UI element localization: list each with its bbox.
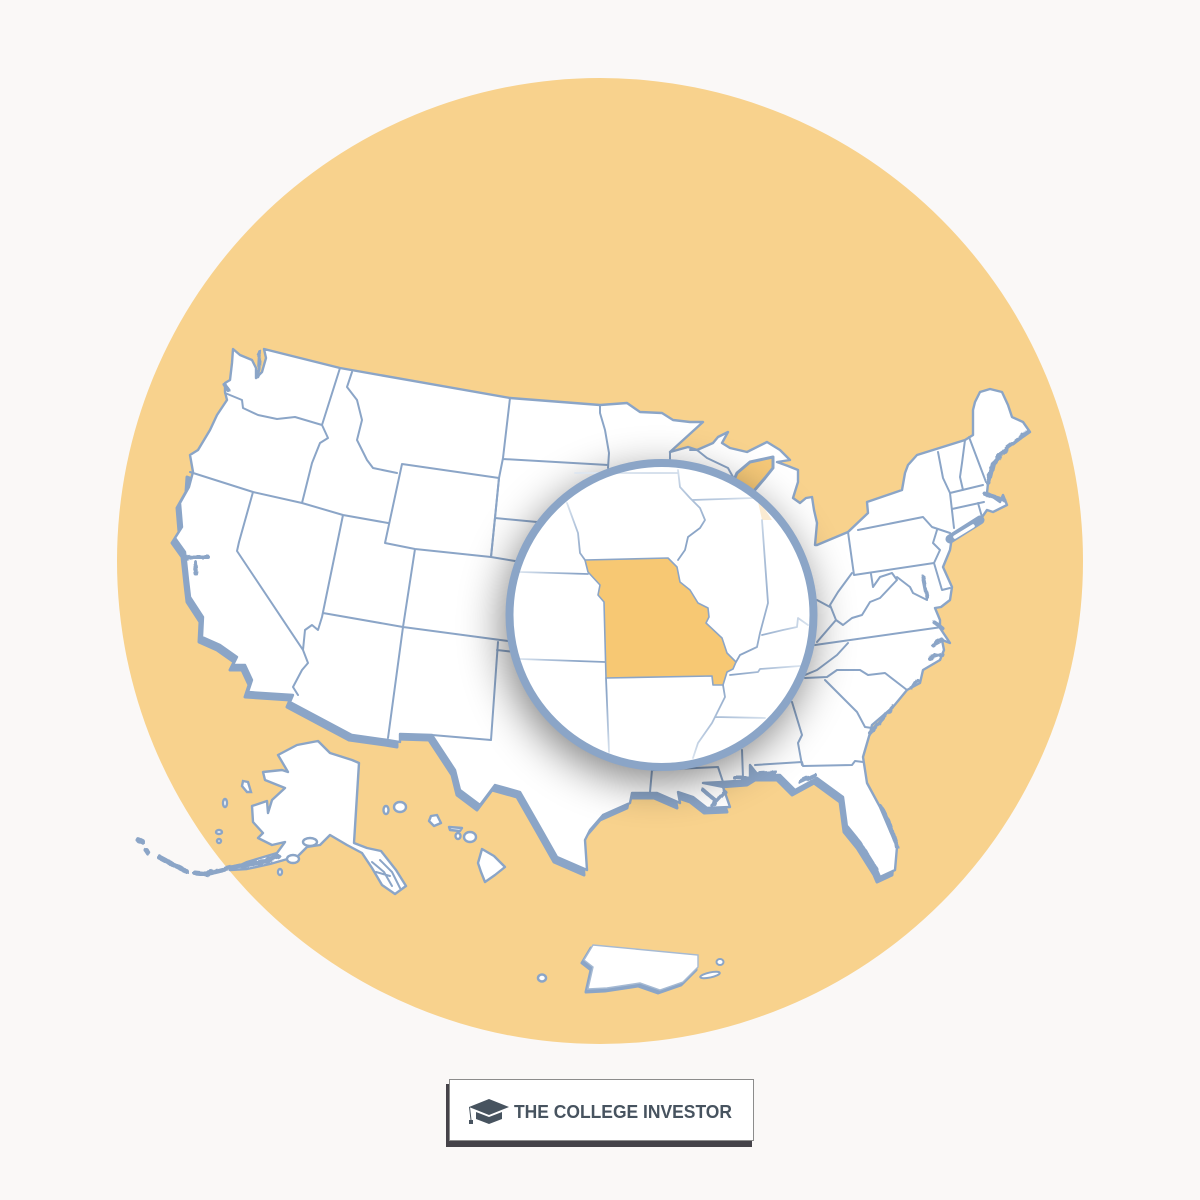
coastline extrusion: [172, 477, 894, 882]
Missouri highlighted: [585, 558, 736, 685]
long island: [950, 520, 980, 539]
thick coastal details: [183, 352, 1028, 870]
magnifier shadow: [503, 473, 811, 781]
lake michigan: [733, 457, 773, 492]
island: Mona: [538, 974, 546, 982]
state borders southeast: [650, 643, 907, 792]
state borders northeast: [848, 437, 986, 575]
state borders mid atlantic: [815, 563, 950, 645]
state borders plains: [491, 398, 609, 557]
map: Puerto Rico: [538, 945, 724, 993]
state borders upper midwest: [670, 450, 733, 477]
map: contiguous United States: [172, 349, 1030, 882]
alaskan islands: [216, 781, 317, 875]
island: Vieques: [700, 970, 720, 980]
lake ghost: [757, 497, 772, 520]
icon: graduation cap: [469, 1099, 509, 1124]
island: Culebra: [716, 959, 724, 965]
logo badge: [446, 1080, 754, 1147]
map: Hawaii: [384, 802, 505, 882]
orange circle backdrop: [117, 78, 1083, 1044]
magnifier lens: [510, 463, 814, 767]
southeast archipelago channels: [372, 860, 400, 888]
lens state borders: [520, 470, 808, 758]
badge panel: [450, 1080, 754, 1140]
lens ring: [510, 463, 814, 767]
map: Alaska: [138, 741, 406, 894]
state borders west: [190, 368, 515, 740]
aleutian islands: [138, 840, 278, 874]
wordmark: THE COLLEGE INVESTOR: [514, 1102, 732, 1122]
land silhouette: [175, 349, 1030, 877]
badge shadow: [446, 1084, 752, 1147]
